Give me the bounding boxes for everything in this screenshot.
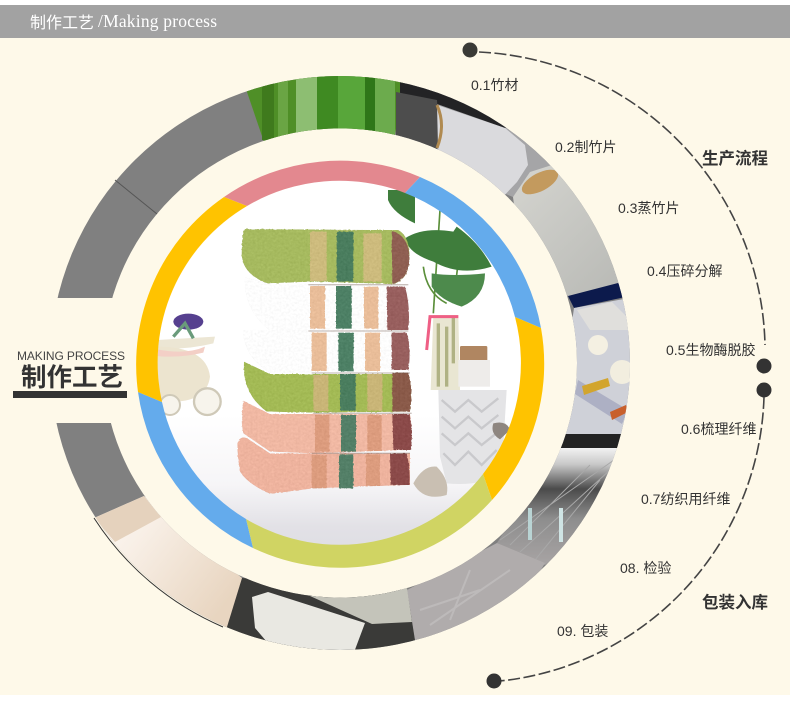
heading: making process: 制作工艺: [21, 364, 123, 392]
step labels: 0.4压碎分解: [647, 263, 722, 279]
step labels: 0.3蒸竹片: [618, 200, 679, 216]
step labels: 08. 检验: [620, 560, 671, 576]
step labels: 0.5生物酶脱胶: [666, 342, 755, 358]
segment: pink: [224, 161, 420, 206]
photo segment: carding machine: [560, 299, 630, 448]
segment: blue lower left: [138, 392, 253, 548]
photo ring: production images: [56, 76, 630, 650]
stage label: production flow: 生产流程: [702, 149, 768, 168]
photo segment: fibre bundle: [407, 543, 544, 640]
photo segment: threads: [497, 448, 617, 565]
stage label: packing: 包装入库: [702, 592, 768, 612]
heading: making process: MAKING PROCESS: [17, 349, 125, 363]
photo segment: thread cone: [513, 166, 622, 308]
towel 6: peach: [237, 437, 410, 494]
dashed timeline: packing: [486, 382, 772, 688]
plant in vase: [388, 190, 492, 390]
photo segment: roll of bamboo pulp: [396, 82, 558, 197]
step labels: 0.7纺织用纤维: [641, 491, 730, 507]
pebbles: [413, 422, 510, 497]
towel 4: green: [244, 362, 411, 413]
separator between grey segments: [115, 180, 157, 214]
glass bottle with cork: [438, 346, 507, 484]
flower cart ornament: [157, 314, 221, 415]
photo segment: boxed towels: [224, 578, 415, 650]
header bar: 制作工艺: [30, 14, 94, 32]
towel 1: green: [242, 229, 409, 284]
step labels: 0.2制竹片: [555, 139, 616, 155]
heading: making process: [13, 349, 127, 398]
gap in the photo ring for the heading: [0, 298, 130, 423]
coloured ring: [136, 161, 544, 568]
header bar: [0, 5, 790, 38]
towel 3: white: [243, 330, 410, 373]
ring outline accent: [94, 518, 223, 627]
towel 2: white: [245, 277, 409, 331]
towel 5: peach: [242, 401, 412, 453]
step labels: 0.6梳理纤维: [681, 421, 756, 437]
segment: yellow left: [136, 197, 247, 402]
segment: green bottom: [246, 474, 492, 568]
photo segment: bamboo: [246, 76, 403, 141]
photo segment: towel texture: [96, 496, 242, 628]
step labels: 09. 包装: [557, 623, 608, 639]
step labels: [471, 77, 756, 639]
segment: yellow right: [483, 317, 544, 500]
segment: blue top right: [405, 177, 541, 328]
header bar: /Making process: [98, 11, 217, 31]
step labels: 0.1竹材: [471, 77, 518, 93]
dashed timeline: production flow: [462, 42, 772, 374]
towel fold shadows: [308, 285, 412, 453]
centre photo: stacked towels: [150, 180, 530, 555]
